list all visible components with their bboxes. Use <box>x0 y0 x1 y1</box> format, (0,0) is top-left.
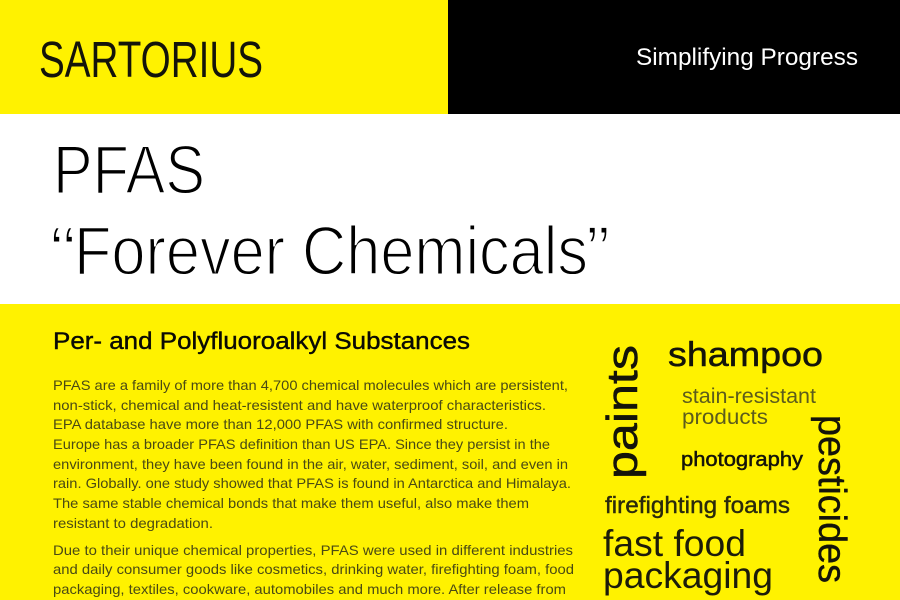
word: paints: paints <box>598 345 647 479</box>
title: “ <box>50 212 76 290</box>
text block: definition paragraph: Europe has a broader PFAS definition than US EPA. Since they persist in the <box>53 436 550 452</box>
heading: Per- and Polyfluoroalkyl Substances <box>53 328 470 355</box>
text block: definition paragraph: environment, they have been found in the air, water, sediment, soil, and even in <box>53 456 568 472</box>
text block: definition paragraph: EPA database have more than 12,000 PFAS with confirmed structure. <box>53 416 508 432</box>
panel: white title band <box>0 114 900 304</box>
title: ” <box>586 212 610 290</box>
title: PFAS <box>53 132 205 208</box>
header panel: black tagline area <box>448 0 900 114</box>
text block: definition paragraph: non-stick, chemical and heat-resistent and have waterproof characteristics. <box>53 397 546 413</box>
word: pesticides: pesticides <box>810 415 853 583</box>
text block: definition paragraph: PFAS are a family of more than 4,700 chemical molecules which are persistent, <box>53 377 568 393</box>
text block: definition paragraph: resistant to degradation. <box>53 515 213 531</box>
word: fast food packaging: packaging <box>603 555 773 596</box>
word: firefighting foams: firefighting foams <box>605 492 790 518</box>
title <box>50 132 610 290</box>
word: shampoo: shampoo <box>668 336 823 374</box>
text block: uses paragraph: packaging, textiles, cookware, automobiles and much more. After release from <box>53 581 566 597</box>
tagline: Simplifying Progress <box>636 44 858 71</box>
word: stain-resistant products: stain-resistant <box>682 385 816 408</box>
text block: uses paragraph: and daily consumer goods like cosmetics, drinking water, firefighting foam, food <box>53 561 574 577</box>
word: stain-resistant products <box>682 385 816 429</box>
word cloud: PFAS uses <box>598 336 853 596</box>
text block: uses paragraph: Due to their unique chemical properties, PFAS were used in different industries <box>53 542 573 558</box>
word: stain-resistant products: products <box>682 406 768 429</box>
header panel: yellow logo area <box>0 0 448 114</box>
panel: yellow content area <box>0 304 900 600</box>
text block: definition paragraph: rain. Globally. one study showed that PFAS is found in Antarctica and Himalaya. <box>53 475 571 491</box>
text block: uses paragraph <box>53 542 574 597</box>
word: fast food packaging <box>603 523 773 596</box>
title: Forever Chemicals <box>74 212 588 290</box>
logo: Sartorius: SARTORIUS <box>39 31 263 88</box>
word: fast food packaging: fast food <box>603 523 746 564</box>
word: photography: photography <box>681 449 803 471</box>
text block: definition paragraph <box>53 377 571 531</box>
text block: definition paragraph: The same stable chemical bonds that make them useful, also make them <box>53 495 529 511</box>
